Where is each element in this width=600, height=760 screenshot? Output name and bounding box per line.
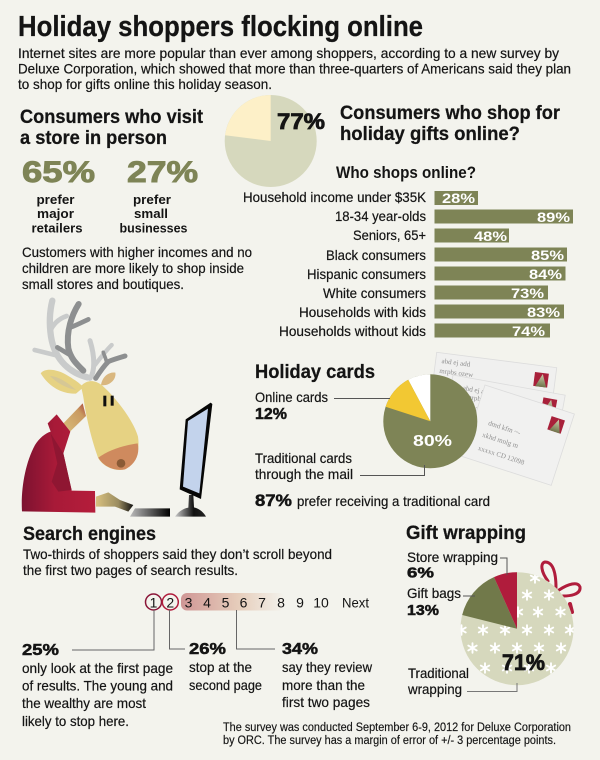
envelope back: mrpbs ozew [439,367,475,379]
pagination graphic [146,593,369,610]
bar: household income: Household income under $35K [243,189,427,205]
bar: households without kids [279,323,550,339]
icon: red sweater [22,414,95,513]
stat: 27 percent small businesses [120,156,198,236]
envelope middle: xxxxx [473,404,492,415]
icon: head [81,381,139,470]
pagination graphic: 3 [185,594,193,610]
stat: 34 percent: first two pages [282,694,370,710]
envelope back: abd ej add [441,357,471,369]
bar: white consumers: 73% [511,285,545,301]
label: online cards: 12% [255,406,287,423]
bar: hispanic consumers [307,266,566,282]
stat: 27 percent small businesses: 27% [127,156,198,189]
pagination graphic: 9 [296,594,304,610]
bar: 18-34: 18-34 year-olds [335,208,426,224]
bar: hispanic consumers: 84% [529,266,563,282]
footnote: by ORC. The survey has a margin of error of +/- 3 percentage points. [223,735,556,747]
text: higher incomes note: children are more likely to shop inside [22,260,244,276]
icon: antlers [35,301,125,378]
panel: gift wrapping [406,522,580,697]
label: store wrapping: 6% [407,564,434,582]
panel: holiday cards [255,352,574,510]
snowflake pattern [457,573,574,673]
stat: 25 percent: only look at the first page [22,660,173,676]
label: traditional cards: Traditional cards [255,450,352,466]
label: gift bags: 13% [407,602,439,619]
label: gift bags [407,585,475,619]
stat: 25 percent: 25% [22,642,59,659]
pagination graphic: 6 [240,594,248,610]
heading: holiday cards: Holiday cards [255,361,375,383]
heading: search engines: Search engines [23,523,156,545]
stat: 65 percent major retailers: prefer [36,192,74,207]
stat: 34 percent: 34% [282,641,318,658]
bar: 18-34 [335,208,573,225]
stat: 65 percent major retailers: 65% [22,156,95,189]
heading: shop online: holiday gifts online? [340,123,520,145]
label: traditional wrapping: wrapping [407,681,462,697]
envelope front: xxxxx CD 12098 [477,444,526,467]
bar: households without kids: Households without kids [279,323,426,339]
icon: keyboard [130,508,170,517]
panel: consumers who visit a store [20,106,252,292]
envelope middle: mrpbs ozew [466,393,501,407]
label: traditional cards: through the mail [255,466,353,482]
icon: ears [41,370,115,394]
bar: households with kids: Households with kids [299,304,426,320]
pagination graphic: Next [342,594,369,610]
bar: hispanic consumers: Hispanic consumers [307,266,426,282]
envelope front: dmd kfm ~- [487,419,522,437]
stat: 27 percent small businesses: businesses [120,220,188,236]
pie chart: gift wrapping: 71% [502,650,545,675]
bar: households without kids: 74% [512,323,546,339]
icon: ribbon bow [542,562,580,612]
label: online cards: Online cards [255,389,328,405]
pagination graphic: 1 [150,594,158,610]
stat: 87 percent prefer traditional: 87% [255,491,292,510]
stat: 34 percent: more than the [282,677,365,693]
pagination graphic: 10 [313,594,329,610]
pagination graphic: 4 [203,594,211,610]
icon: nose [98,443,138,470]
illustration: reindeer at computer [22,301,212,517]
pagination graphic: 7 [258,594,266,610]
stat: 65 percent major retailers [22,156,95,236]
footnote: The survey was conducted September 6-9, 2012 for Deluxe Corporation [223,722,571,734]
stat: 25 percent [22,642,173,729]
bar: seniors: Seniors, 65+ [353,227,426,243]
pie chart: cards: 80% [413,433,452,450]
stat: 34 percent: say they review [282,659,373,675]
bar: black consumers: 85% [531,247,565,263]
envelope middle: abd ej add [462,384,492,397]
bar: white consumers [323,285,548,301]
envelope middle [441,375,565,464]
text: higher incomes note: small stores and boutiques. [22,276,184,292]
pie chart: cards [383,374,477,468]
label: store wrapping: Store wrapping [407,549,498,565]
chart heading: Who shops online? [336,163,476,182]
bar: black consumers [326,247,567,263]
icon: hand [96,492,133,512]
stat: 65 percent major retailers: retailers [32,220,82,236]
bar: seniors: 48% [474,228,508,244]
heading: visit a store: a store in person [20,127,167,149]
illustration: envelopes [431,352,574,485]
label: online cards [255,389,390,423]
heading: shop online [340,102,560,145]
intro text [18,45,571,92]
pie chart: gift wrapping [457,572,574,685]
stat: 87 percent prefer traditional [255,491,490,510]
icon: monitor [175,403,212,517]
stat: 87 percent prefer traditional: prefer receiving a traditional card [297,493,490,509]
intro text: Internet sites are more popular than ever among shoppers, according to a new survey by [18,45,559,61]
pagination graphic: 2 [166,594,174,610]
pagination graphic: 8 [277,594,285,610]
stat: 65 percent major retailers: major [37,206,74,221]
heading: visit a store: Consumers who visit [20,106,203,128]
bar: households with kids: 83% [527,304,561,320]
bar: 18-34: 89% [537,209,571,225]
bar: households with kids [299,304,564,320]
icon: nostril [117,459,125,468]
stat: 34 percent [282,641,373,710]
icon: neck [63,403,86,432]
bar: white consumers: White consumers [323,285,426,301]
stat: 25 percent: the wealthy are most [22,695,146,711]
pie chart: 77 percent shop online [225,95,325,187]
label: store wrapping [407,549,507,582]
label: traditional cards [255,450,424,482]
label: traditional wrapping: Traditional [408,665,469,681]
intro text: Deluxe Corporation, which showed that more than three-quarters of Americans said they plan [18,60,571,76]
bar chart: who shops online [243,163,573,339]
stat: 25 percent: of results. The young and [22,678,173,694]
icon: eyes [103,396,114,406]
intro text: to shop for gifts online this holiday season. [18,76,272,92]
text: higher incomes note [22,244,252,292]
bar: black consumers: Black consumers [326,247,426,263]
label: traditional wrapping [407,665,517,697]
text: search intro: the first two pages of search results. [23,562,238,578]
footnote [223,722,571,747]
text: higher incomes note: Customers with higher incomes and no [22,244,252,260]
stat: 26 percent: second page [189,677,262,693]
bar: seniors [353,227,509,244]
text: search intro [23,546,332,578]
panel: search engines [22,523,373,729]
heading: gift wrapping: Gift wrapping [406,522,526,544]
stat: 26 percent [189,641,262,693]
stat: 26 percent: stop at the [189,659,252,675]
envelope front: xkhd mnlg m [481,431,520,450]
envelope front [462,385,574,485]
stat: 25 percent: likely to stop here. [22,713,129,729]
pagination graphic: 5 [222,594,230,610]
bar: household income: 28% [442,190,476,206]
stat: 26 percent: 26% [189,641,226,658]
stat: 27 percent small businesses: prefer [133,192,171,207]
pie chart: 77 percent shop online: 77% [277,109,325,134]
stat: 27 percent small businesses: small [134,206,168,221]
envelope back [431,352,557,412]
connector lines [72,610,275,650]
title: Holiday shoppers flocking online [18,11,423,43]
text: search intro: Two-thirds of shoppers said they don’t scroll beyond [23,546,332,562]
heading: visit a store [20,106,203,149]
heading: shop online: Consumers who shop for [340,102,560,124]
label: gift bags: Gift bags [407,585,461,601]
